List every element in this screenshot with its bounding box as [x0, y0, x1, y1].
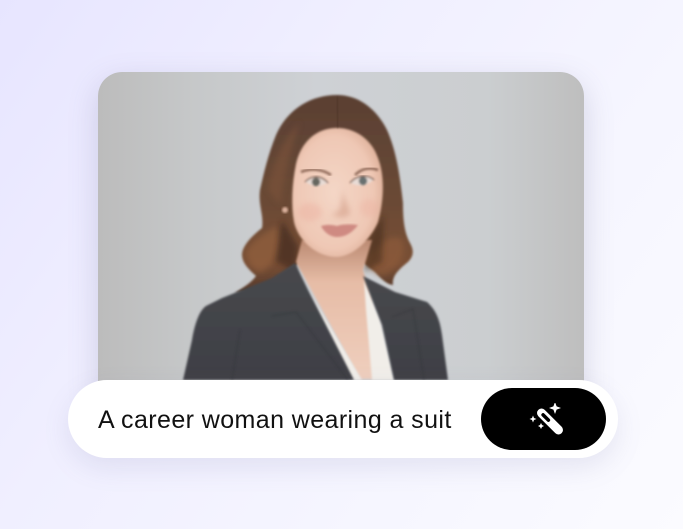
prompt bar: [68, 380, 618, 458]
panel: portrait photo card: [98, 72, 584, 412]
icon: magic wand: [530, 403, 563, 434]
eyes: [305, 176, 374, 186]
neck and chest: [296, 240, 374, 379]
lips: [321, 224, 358, 237]
cheek blush: [298, 203, 322, 221]
generate button: [481, 388, 606, 450]
hair: [235, 95, 413, 293]
nose shadow: [331, 188, 350, 217]
face: [292, 128, 383, 257]
ear: [282, 207, 288, 213]
white blouse: [308, 280, 394, 380]
lapel shadows: [232, 309, 424, 380]
prompt text: A career woman wearing a suit: [98, 406, 452, 434]
woman portrait: [183, 95, 448, 380]
hair highlights: [246, 226, 279, 272]
eyebrows: [301, 170, 331, 175]
jacket left side: [183, 263, 354, 380]
hair parting: [337, 97, 338, 128]
jacket right side: [363, 276, 448, 380]
studio background: [98, 72, 584, 412]
